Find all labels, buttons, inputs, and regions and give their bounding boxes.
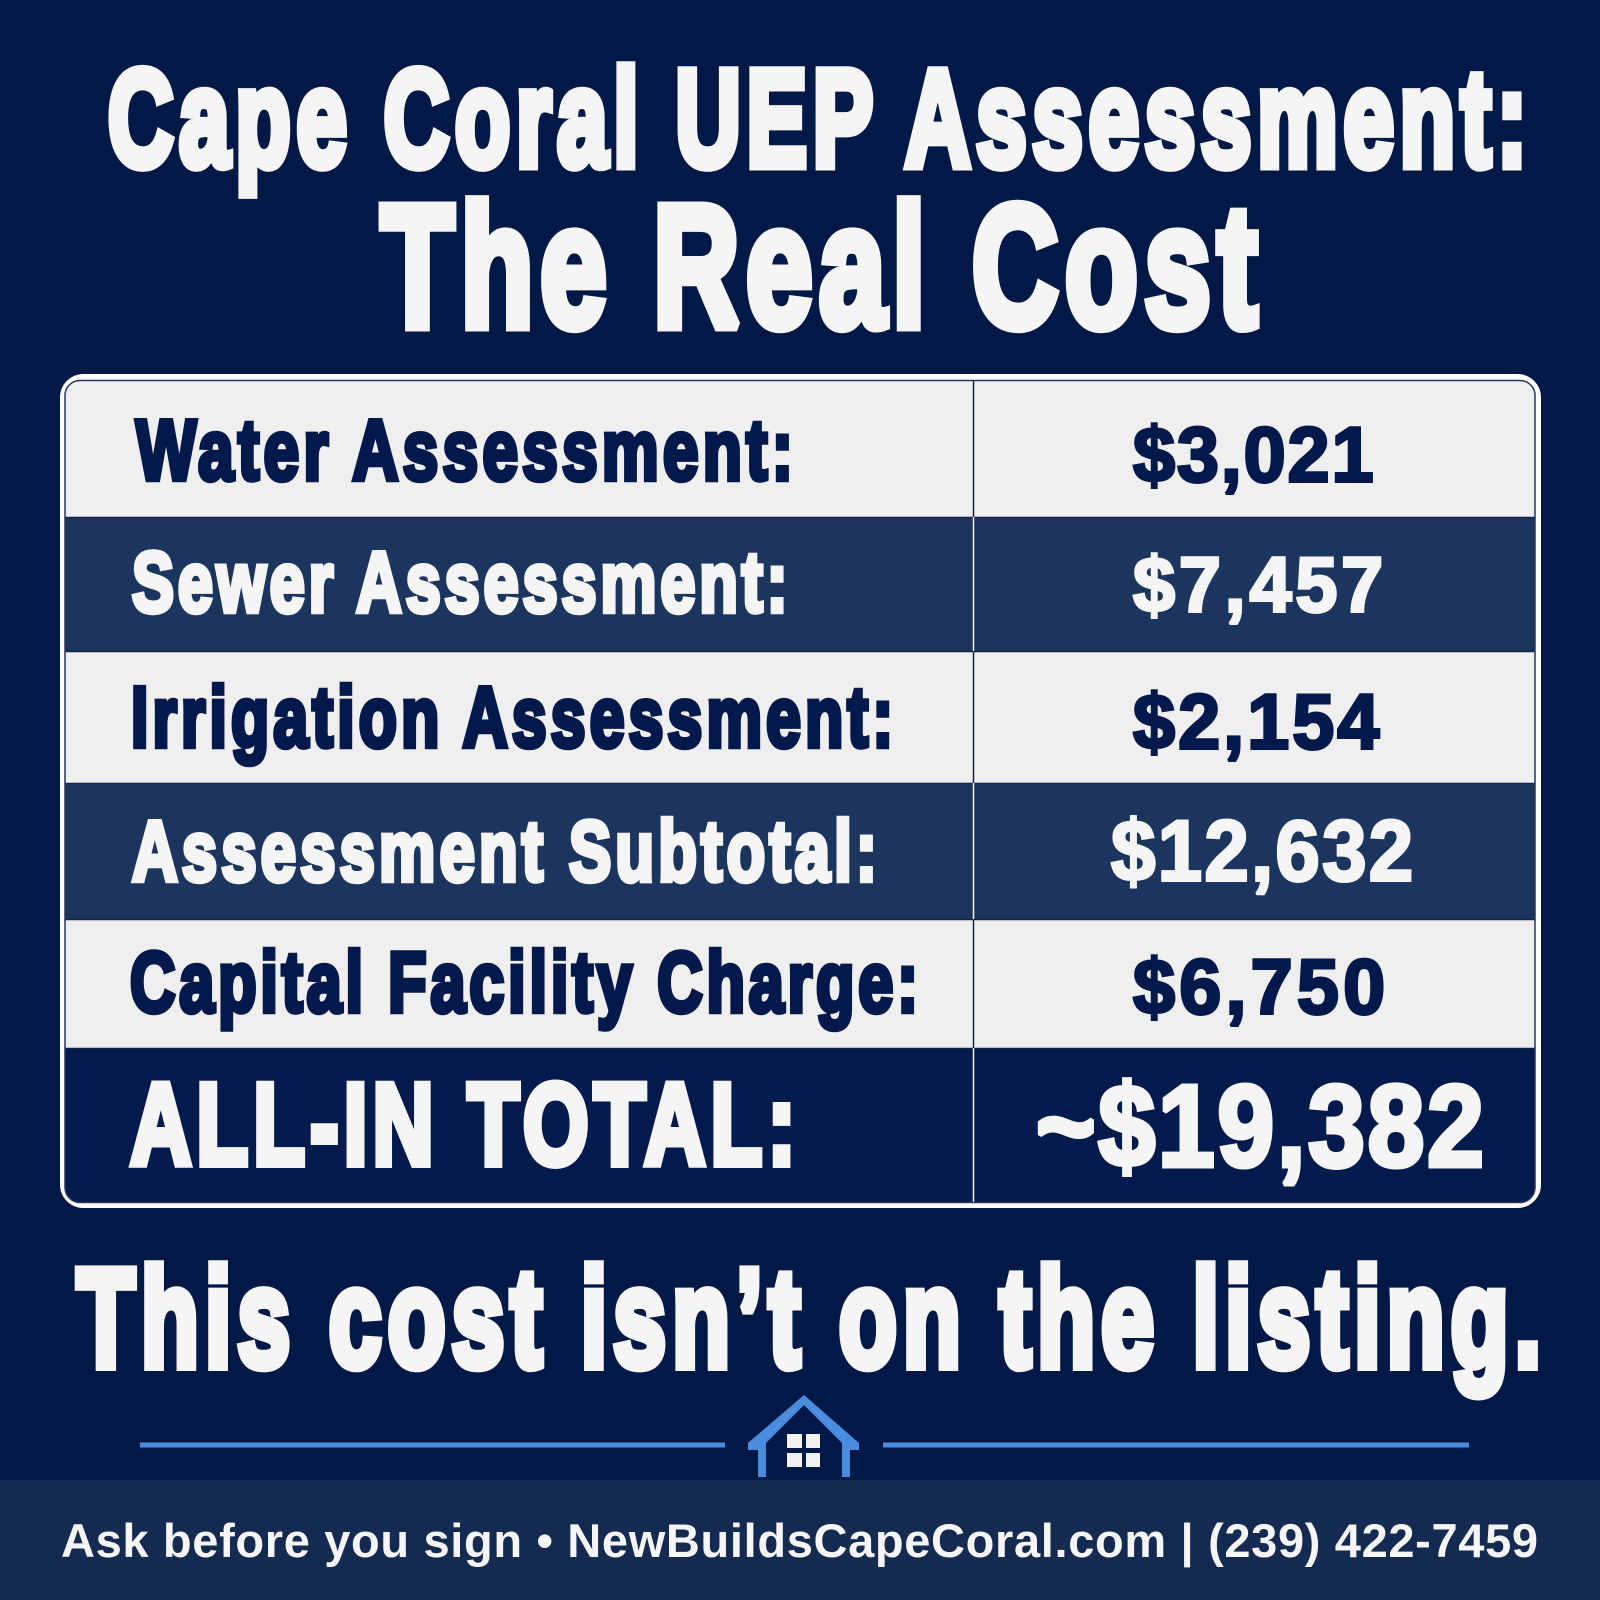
row: irrigation assessment: Irrigation Assessment: (131, 669, 893, 765)
row: all-in total (130, 1061, 1484, 1191)
row: irrigation assessment (131, 669, 1380, 766)
row: water assessment: $3,021 (1133, 411, 1374, 499)
row: assessment subtotal: Assessment Subtotal: (132, 803, 877, 899)
row: sewer assessment (132, 534, 1383, 630)
divider with house icon (140, 1395, 1469, 1477)
title: Cape Coral UEP Assessment: (108, 42, 1527, 195)
row: capital facility charge: $6,750 (1133, 943, 1385, 1031)
row: capital facility charge (130, 934, 1385, 1031)
title: The Real Cost (381, 170, 1257, 363)
callout: not on the listing: This cost isn’t on the listing. (77, 1241, 1541, 1396)
row: irrigation assessment: $2,154 (1133, 678, 1380, 766)
row: assessment subtotal (132, 803, 1413, 899)
row: sewer assessment: $7,457 (1133, 541, 1383, 629)
footer bar (0, 1480, 1600, 1600)
title (108, 42, 1527, 363)
row: all-in total: ~$19,382 (1036, 1062, 1484, 1191)
panel: cost table (62, 376, 1538, 1206)
row: capital facility charge: Capital Facility Charge: (130, 934, 918, 1030)
icon: house (748, 1395, 859, 1477)
footer bar: Ask before you sign • NewBuildsCapeCoral.com | (239) 422-7459 (61, 1514, 1538, 1567)
row: sewer assessment: Sewer Assessment: (132, 534, 788, 630)
row: water assessment: Water Assessment: (136, 403, 793, 498)
row: assessment subtotal: $12,632 (1111, 803, 1413, 899)
row: water assessment (136, 403, 1374, 499)
row: all-in total: ALL-IN TOTAL: (130, 1061, 796, 1189)
